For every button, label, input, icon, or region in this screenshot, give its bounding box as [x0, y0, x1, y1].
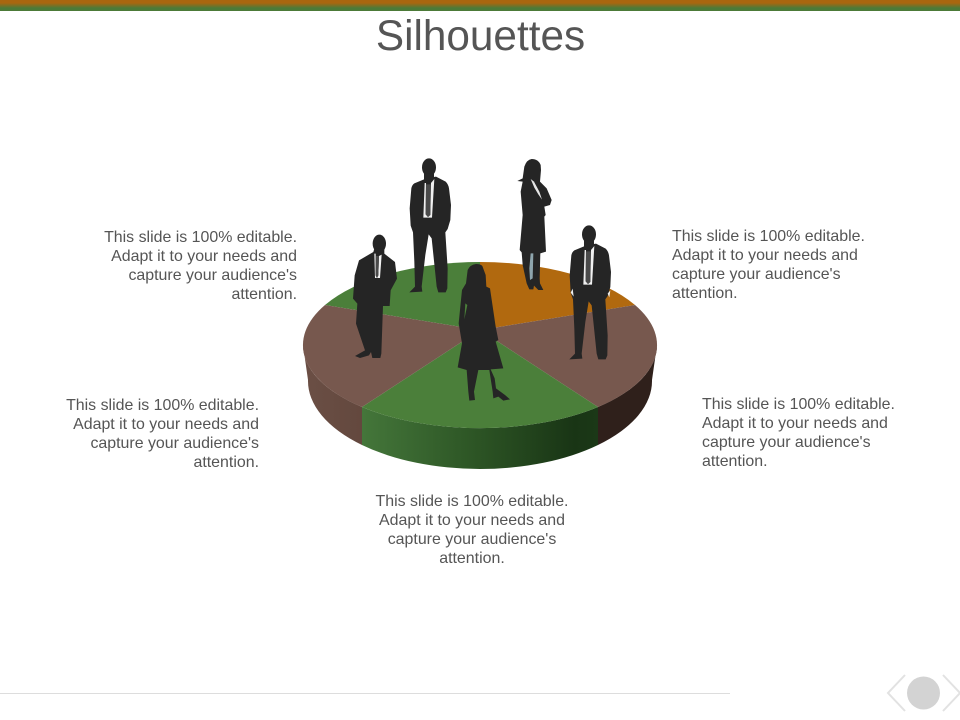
text block: upper left: Adapt it to your needs and — [111, 248, 297, 265]
text block: lower left — [66, 397, 259, 471]
pie: side walls — [303, 345, 657, 469]
text block: upper left: This slide is 100% editable. — [104, 229, 297, 246]
silhouette: man, back centre — [409, 158, 451, 292]
silhouette: woman, front — [458, 264, 510, 401]
text block: bottom centre — [376, 493, 568, 567]
silhouette: man, left — [353, 235, 397, 358]
text block: upper right: Adapt it to your needs and — [672, 247, 858, 264]
text block: lower left: This slide is 100% editable. — [66, 397, 259, 414]
text block: lower left: attention. — [193, 454, 259, 471]
text block: lower right — [702, 396, 895, 470]
text block: upper right — [672, 228, 865, 302]
text block: bottom centre: capture your audience's — [388, 531, 556, 548]
text block: lower right: This slide is 100% editable. — [702, 396, 895, 413]
text block: upper left: attention. — [231, 286, 297, 303]
text block: upper left: capture your audience's — [128, 267, 297, 284]
pie: top slices — [303, 262, 657, 428]
text block: lower right: attention. — [702, 453, 768, 470]
text block: bottom centre: Adapt it to your needs and — [379, 512, 565, 529]
text block: upper right: attention. — [672, 285, 738, 302]
text block: lower right: Adapt it to your needs and — [702, 415, 888, 432]
text block: lower left: capture your audience's — [90, 435, 259, 452]
text block: upper right: capture your audience's — [672, 266, 841, 283]
text block: upper right: This slide is 100% editable. — [672, 228, 865, 245]
title: Silhouettes — [376, 12, 585, 59]
text block: bottom centre: attention. — [439, 550, 505, 567]
silhouette: man, right — [569, 225, 611, 359]
text block: bottom centre: This slide is 100% editable. — [376, 493, 568, 510]
text block: lower left: Adapt it to your needs and — [73, 416, 259, 433]
navigation icon — [888, 675, 960, 711]
top colour bar — [0, 0, 960, 11]
silhouette: woman, back — [517, 159, 552, 290]
text block: upper left — [104, 229, 297, 303]
text block: lower right: capture your audience's — [702, 434, 871, 451]
